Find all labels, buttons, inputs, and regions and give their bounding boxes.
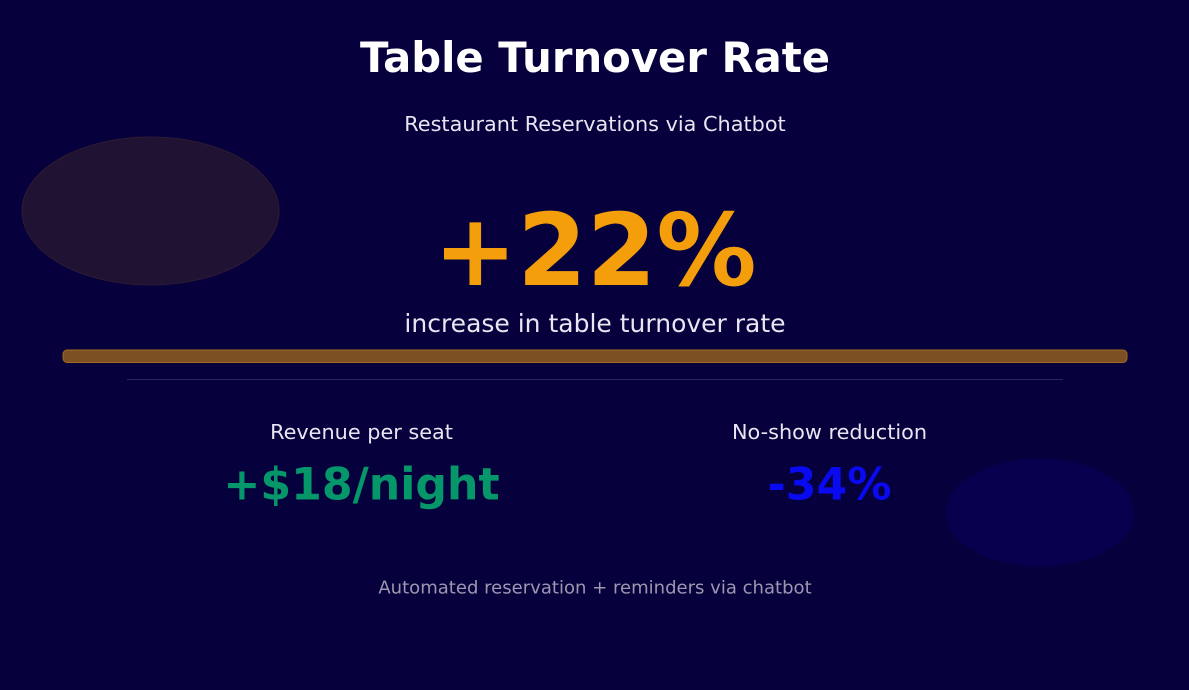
stat: no-show reduction [732,420,927,510]
progress bar [63,350,1127,362]
divider [127,379,1063,380]
revenue label: Revenue per seat [270,420,453,444]
stat: revenue per seat [223,420,500,510]
decorative ellipse: amber tint [22,137,279,285]
main metric caption: increase in table turnover rate [404,309,786,338]
title: Table Turnover Rate [360,33,830,82]
main metric: +22% [433,192,757,309]
footnote: Automated reservation + reminders via chatbot [378,578,812,598]
subtitle: Restaurant Reservations via Chatbot [404,112,786,136]
revenue value: +$18/night [223,460,500,510]
no-show label: No-show reduction [732,420,927,444]
decorative ellipse: blue tint [946,458,1134,566]
no-show value: -34% [767,460,892,510]
